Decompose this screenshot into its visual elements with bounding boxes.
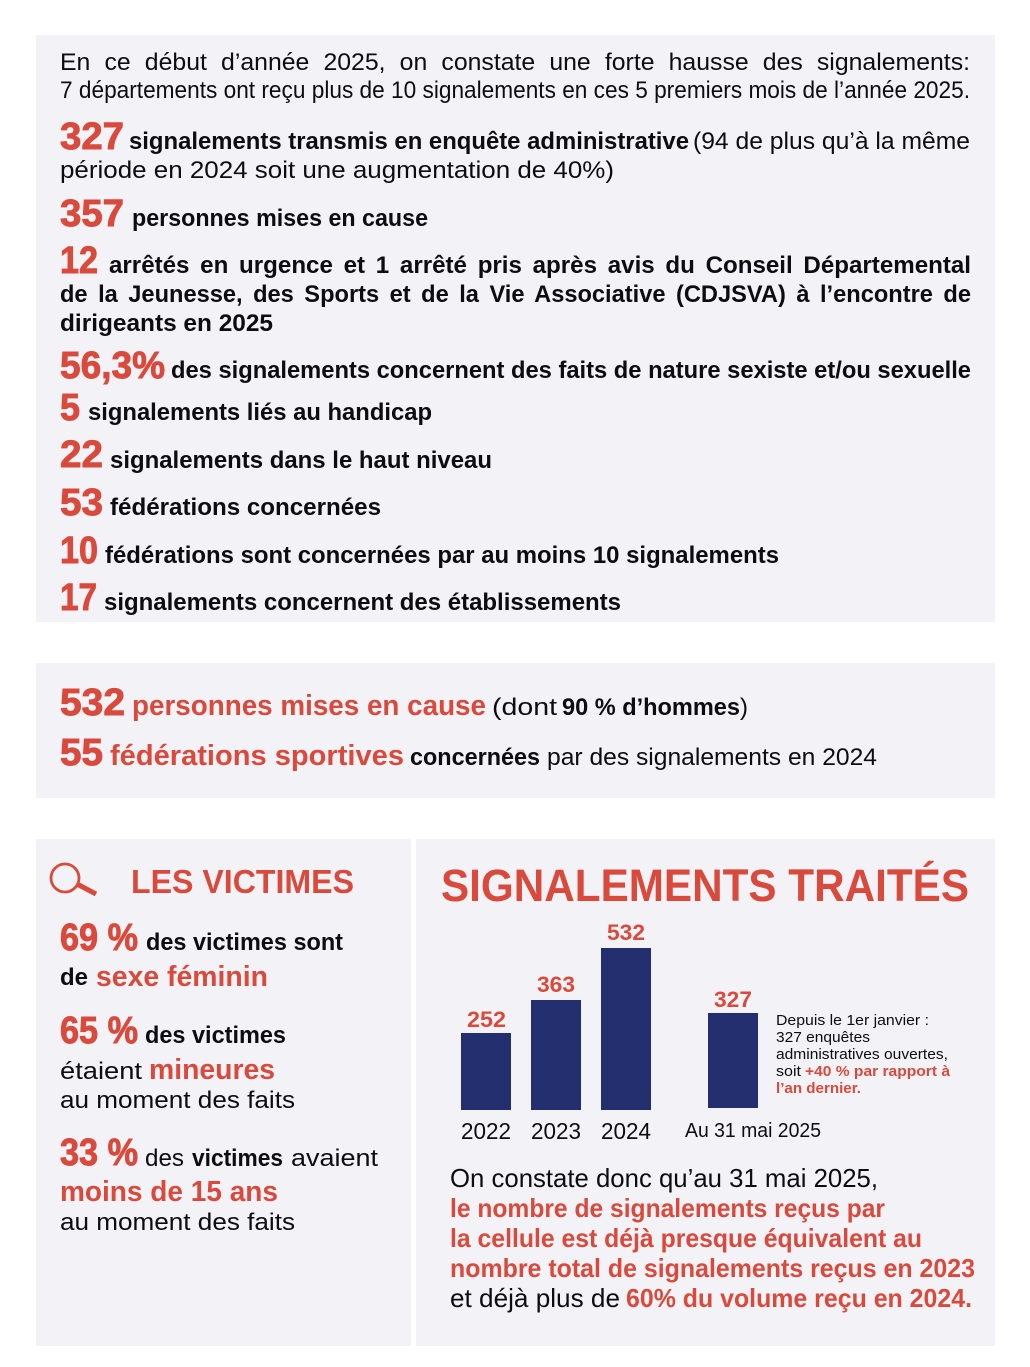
chart note: +40 % par rapport à	[805, 1063, 951, 1080]
stat: 5 handicap	[60, 387, 432, 429]
stat: 33 %	[60, 1132, 378, 1236]
stat: 5 handicap: 5	[60, 387, 80, 429]
stat: 65 %: étaient	[60, 1058, 142, 1085]
stat: 56,3%	[60, 345, 971, 387]
stat: 55 fédérations: concernées	[410, 744, 540, 771]
stat: 10 fédérations: 10	[60, 530, 98, 572]
stat: 69 %: de	[60, 964, 88, 991]
stat: 69 %: des victimes sont	[146, 929, 343, 956]
bar: 2024: 532	[607, 920, 645, 945]
stat: 532 personnes: 90 % d’hommes	[562, 694, 740, 721]
stat: 357 personnes: personnes mises en cause	[132, 205, 428, 232]
intro text: En ce début d’année 2025, on constate une forte hausse des signalements:	[60, 49, 970, 76]
bar: au 31 mai 2025: 327	[714, 987, 752, 1012]
stat: 532 personnes: personnes mises en cause	[132, 690, 486, 722]
stat: 65 %: mineures	[149, 1054, 275, 1086]
icon: magnifying glass	[51, 864, 96, 894]
chart note: Depuis le 1er janvier :	[776, 1012, 929, 1029]
conclusion text: et déjà plus de	[450, 1283, 620, 1313]
chart note: soit	[776, 1063, 802, 1080]
stat: 65 %: 65 %	[60, 1010, 138, 1052]
stat: 33 %: avaient	[291, 1145, 378, 1172]
stat: 55 fédérations: par des signalements en 2024	[547, 744, 877, 771]
stat: 10 fédérations: fédérations sont concernées par au moins 10 signalements	[105, 542, 779, 569]
bar chart	[461, 920, 821, 1144]
conclusion text: 60% du volume reçu en 2024.	[626, 1283, 972, 1313]
heading: signalements traités: SIGNALEMENTS TRAITÉS	[441, 860, 969, 911]
stat: 55 fédérations: fédérations sportives	[110, 740, 404, 772]
stat: 17 établissements: 17	[60, 577, 97, 619]
stat: 53 fédérations: fédérations concernées	[110, 494, 381, 521]
conclusion text	[450, 1163, 975, 1313]
chart note: 327 enquêtes	[776, 1029, 870, 1046]
conclusion text: nombre total de signalements reçus en 2023	[450, 1253, 975, 1283]
stat: 55 fédérations: 55	[60, 732, 103, 774]
stat: 327 signalements: (94 de plus qu’à la même	[693, 128, 970, 155]
stat: 327 signalements: période en 2024 soit une augmentation de 40%)	[60, 157, 614, 184]
intro text	[60, 49, 970, 104]
heading: les victimes: LES VICTIMES	[131, 863, 354, 900]
bar: 2022: 2022	[461, 1118, 511, 1144]
conclusion text: On constate donc qu’au 31 mai 2025,	[450, 1163, 878, 1193]
conclusion text: la cellule est déjà presque équivalent au	[450, 1223, 922, 1253]
stat: 12 arrêtés: dirigeants en 2025	[60, 310, 273, 337]
bar: au 31 mai 2025	[685, 987, 821, 1142]
bar: 2024	[601, 920, 651, 1144]
stat: 56,3%: 56,3%	[60, 345, 165, 387]
conclusion text: le nombre de signalements reçus par	[450, 1193, 885, 1223]
intro text: 7 départements ont reçu plus de 10 signalements en ces 5 premiers mois de l’année 2025.	[60, 77, 970, 104]
stat: 327 signalements	[60, 116, 970, 184]
stat: 65 %	[60, 1010, 295, 1114]
stat: 532 personnes: (dont	[492, 694, 557, 721]
stat: 12 arrêtés: arrêtés en urgence et 1 arrêté pris après avis du Conseil Départemental	[109, 252, 971, 279]
stat: 5 handicap: signalements liés au handicap	[88, 399, 432, 426]
stat: 10 fédérations	[60, 530, 779, 572]
panel: les victimes	[36, 839, 411, 1346]
panel: key figures 2025	[36, 35, 995, 622]
stat: 53 fédérations	[60, 482, 381, 524]
stat: 53 fédérations: 53	[60, 482, 103, 524]
bar: 2023	[531, 972, 581, 1144]
stat: 327 signalements: signalements transmis en enquête administrative	[129, 128, 689, 155]
stat: 33 %: victimes	[192, 1145, 283, 1172]
chart note: l’an dernier.	[776, 1080, 861, 1097]
stat: 22 haut niveau	[60, 434, 492, 476]
stat: 65 %: des victimes	[145, 1022, 286, 1049]
stat: 33 %: des	[145, 1145, 184, 1172]
stat: 357 personnes: 357	[60, 193, 124, 235]
bar: 2023: 2023	[531, 1118, 581, 1144]
chart note: administratives ouvertes,	[776, 1046, 948, 1063]
bar: 2022: 252	[467, 1007, 506, 1032]
stat: 69 %: 69 %	[60, 917, 138, 959]
stat: 532 personnes: 532	[60, 682, 125, 724]
stat: 12 arrêtés: 12	[60, 240, 98, 282]
stat: 69 %: sexe féminin	[96, 961, 268, 993]
stat: 33 %: moins de 15 ans	[60, 1176, 278, 1208]
stat: 532 personnes: )	[740, 694, 748, 721]
bar: 2022	[461, 1007, 511, 1144]
stat: 55 fédérations	[60, 732, 877, 774]
stat: 327 signalements: 327	[60, 116, 124, 158]
stat: 17 établissements: signalements concernent des établissements	[104, 589, 621, 616]
stat: 12 arrêtés	[60, 240, 971, 337]
stat: 22 haut niveau: signalements dans le haut niveau	[110, 447, 492, 474]
stat: 22 haut niveau: 22	[60, 434, 103, 476]
bar: 2023: 363	[537, 972, 575, 997]
bar: 2024: 2024	[601, 1118, 651, 1144]
panel: key figures 2024	[36, 663, 995, 798]
stat: 56,3%: des signalements concernent des faits de nature sexiste et/ou sexuelle	[171, 357, 971, 384]
panel: signalements traités	[416, 839, 995, 1346]
chart note	[776, 1012, 951, 1097]
bar: au 31 mai 2025: Au 31 mai 2025	[685, 1120, 821, 1142]
stat: 33 %: au moment des faits	[60, 1209, 295, 1236]
stat: 12 arrêtés: de la Jeunesse, des Sports et de la Vie Associative (CDJSVA) à l’encontre de	[60, 281, 971, 308]
stat: 17 établissements	[60, 577, 621, 619]
stat: 357 personnes	[60, 193, 428, 235]
stat: 65 %: au moment des faits	[60, 1087, 295, 1114]
stat: 532 personnes	[60, 682, 748, 724]
stat: 69 %	[60, 917, 343, 993]
stat: 33 %: 33 %	[60, 1132, 138, 1174]
